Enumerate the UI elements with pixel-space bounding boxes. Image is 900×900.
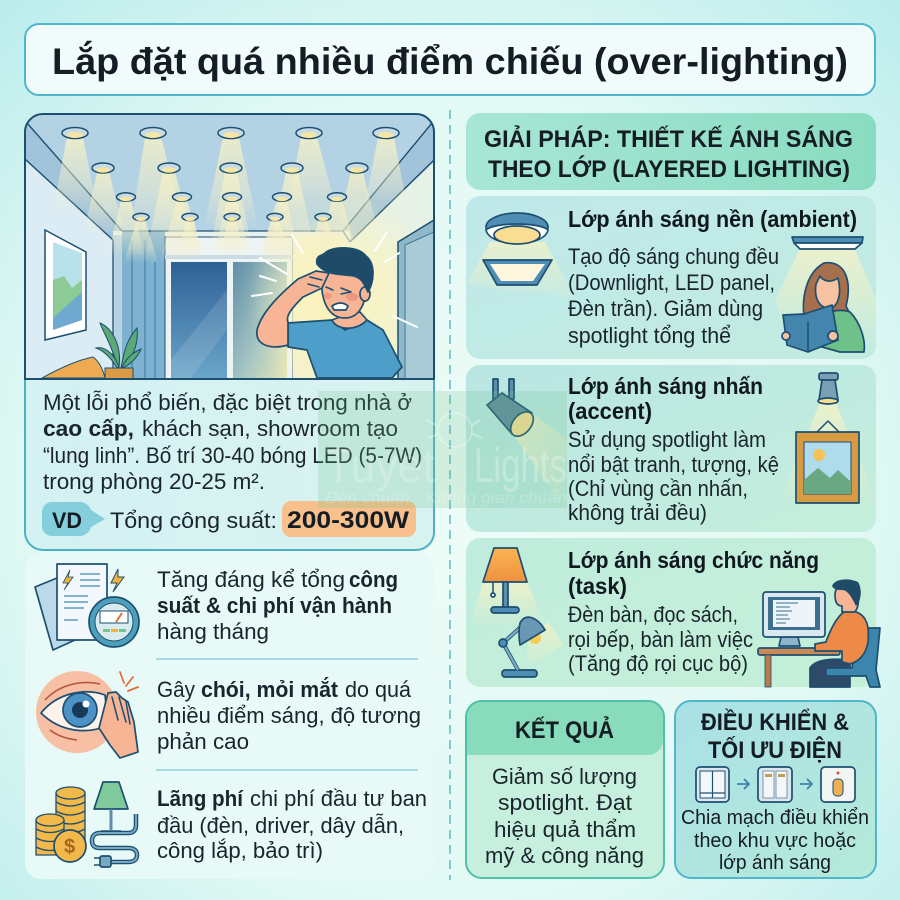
body text: Giảm số lượng: [492, 764, 637, 789]
text: waste: đầu (đèn, driver, dây dẫn,: [157, 813, 404, 838]
panel: accent layer: [466, 365, 876, 532]
body text: [485, 764, 644, 868]
potted plant: [105, 368, 133, 379]
icon: coins and lamp with plug: $: [64, 836, 75, 858]
description text: trong phòng 20-25 m².: [43, 469, 265, 494]
text: cost: hàng tháng: [157, 619, 269, 644]
glare glow: [252, 204, 404, 378]
text: task: [568, 547, 819, 676]
text: accent: Lớp ánh sáng nhấn: [568, 373, 763, 399]
text: waste: [157, 786, 427, 863]
VD badge: VD: [52, 508, 82, 533]
description text: “lung linh”. Bố trí 30-40 bóng LED (5-7W): [43, 443, 422, 468]
icon: dimmer switch: [821, 767, 855, 802]
text: waste: chi phí đầu tư ban: [250, 786, 427, 811]
text: glare: Gây: [157, 677, 196, 702]
text: task: Lớp ánh sáng chức năng: [568, 547, 819, 573]
body text: mỹ & công năng: [485, 843, 644, 868]
text: glare: [157, 677, 421, 754]
heading: [701, 708, 849, 764]
icon: table lamp and desk lamp: [470, 548, 564, 677]
text: accent: [568, 373, 779, 525]
illustration: person at computer: [758, 579, 880, 687]
dashed column divider: [449, 110, 451, 880]
arrow: [800, 779, 812, 789]
body text: Chia mạch điều khiển: [681, 807, 869, 829]
solution heading: THEO LỚP (LAYERED LIGHTING): [488, 155, 850, 183]
man shielding eyes: [257, 248, 402, 378]
heading: TỐI ƯU ĐIỆN: [708, 736, 842, 764]
arrow: [737, 779, 749, 789]
icon: spotlight: [487, 379, 567, 510]
illustration: accent-lit framed picture: [780, 373, 876, 503]
watermark: Đèn chuẩn - Không gian chuẩn: [325, 489, 567, 507]
text: ambient: spotlight tổng thể: [568, 323, 731, 348]
title banner: [25, 24, 875, 95]
recessed ceiling lights: [62, 128, 399, 221]
illustration: woman reading under panel light: [775, 237, 876, 352]
text: ambient: [568, 206, 857, 348]
text: ambient: Lớp ánh sáng nền (ambient): [568, 206, 857, 232]
title banner: Lắp đặt quá nhiều điểm chiếu (over-lighting): [52, 40, 848, 82]
VD badge: [42, 502, 105, 536]
panel: result: [466, 701, 664, 878]
text: glare: do quá: [345, 677, 412, 702]
heading: ĐIỀU KHIỂN &: [701, 708, 849, 736]
sofa: [42, 357, 105, 378]
body text: hiệu quả thẩm: [494, 817, 636, 842]
wall painting: [45, 230, 86, 340]
text: cost: [157, 567, 398, 644]
solution heading: GIẢI PHÁP: THIẾT KẾ ÁNH SÁNG: [484, 124, 853, 153]
text: cost: suất & chi phí vận hành: [157, 593, 392, 618]
total power value: Tổng công suất:: [110, 508, 277, 533]
panel: over-lighting problem: [25, 114, 443, 550]
icon: wall switch: [696, 767, 729, 802]
text box below illustration: [25, 379, 434, 550]
text: accent: (Chỉ vùng cần nhấn,: [568, 476, 748, 501]
text: cost: Tăng đáng kể tổng: [157, 567, 345, 592]
description text: cao cấp,: [43, 416, 134, 441]
text: cost: công: [349, 567, 398, 592]
body text: lớp ánh sáng: [719, 852, 831, 874]
icon: double switch: [758, 767, 792, 802]
text: ambient: Tạo độ sáng chung đều: [568, 244, 779, 269]
body text: spotlight. Đạt: [498, 790, 632, 815]
heading: KẾT QUẢ: [515, 715, 614, 744]
text: accent: không trải đều): [568, 500, 707, 525]
panel: consequences: [25, 553, 434, 879]
total power value: 200-300W: [287, 507, 410, 534]
total power value: [110, 501, 416, 537]
text: accent: Sử dụng spotlight làm: [568, 427, 766, 452]
text: task: (Tăng độ rọi cục bộ): [568, 651, 748, 676]
watermark: Lights: [474, 440, 567, 493]
panel: ambient layer: [466, 196, 876, 359]
body text: [681, 807, 869, 874]
icon: coins and lamp with plug: [36, 782, 137, 867]
description text: [43, 390, 422, 494]
ceiling beams: [53, 137, 408, 262]
watermark: Tuyet: [325, 440, 435, 493]
text: task: (task): [568, 573, 627, 599]
glare rays: [252, 232, 417, 327]
door on right wall: [398, 220, 434, 379]
icon: strained eye and hand: [36, 671, 138, 758]
text: glare: chói, mỏi mắt: [201, 677, 339, 702]
solution heading: [466, 113, 876, 190]
text: accent: (accent): [568, 398, 652, 424]
watermark: [318, 391, 567, 508]
text: waste: công lắp, bảo trì): [157, 838, 323, 863]
text: task: rọi bếp, bàn làm việc: [568, 627, 753, 652]
text: waste: Lãng phí: [157, 786, 244, 811]
description text: khách sạn, showroom tạo: [142, 416, 398, 441]
text: glare: phản cao: [157, 729, 249, 754]
illustration: over-lit room with glare-struck man: [26, 115, 433, 378]
text: glare: nhiều điểm sáng, độ tương: [157, 703, 421, 728]
text: ambient: (Downlight, LED panel,: [568, 270, 775, 295]
icon: bills and electric meter: [35, 564, 139, 650]
panel: task layer: [466, 538, 880, 687]
panel: control and power optimisation: [675, 701, 876, 878]
text: accent: nổi bật tranh, tượng, kệ: [568, 452, 779, 477]
text: task: Đèn bàn, đọc sách,: [568, 602, 738, 627]
icon: ceiling lights: [466, 213, 575, 298]
description text: Một lỗi phổ biến, đặc biệt trong nhà ở: [43, 390, 412, 415]
text: ambient: Đèn trần). Giảm dùng: [568, 296, 763, 321]
body text: theo khu vực hoặc: [694, 830, 856, 852]
